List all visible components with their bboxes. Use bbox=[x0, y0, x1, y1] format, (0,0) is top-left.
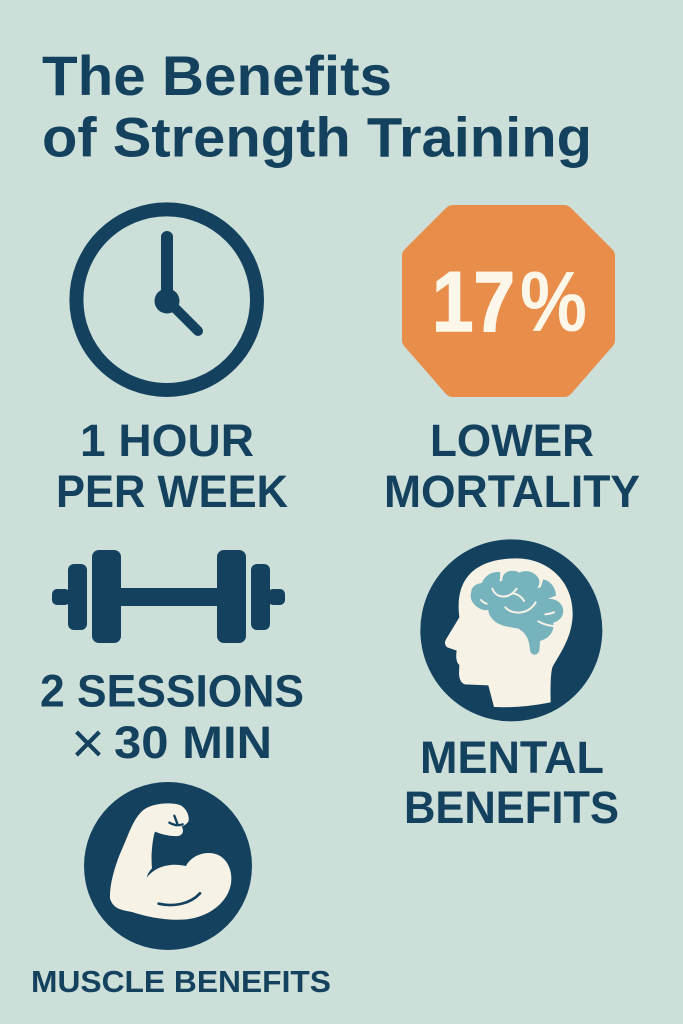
icon: dumbbell bbox=[52, 550, 285, 643]
head silhouette bbox=[445, 558, 573, 707]
label: lower mortality: LOWER bbox=[430, 415, 594, 466]
label: 1 hour per week bbox=[56, 415, 288, 517]
title bbox=[42, 44, 592, 168]
label: 2 sessions x 30 min: 30 MIN bbox=[114, 717, 272, 768]
label: 2 sessions x 30 min bbox=[40, 666, 304, 776]
label: lower mortality bbox=[384, 415, 640, 517]
title: The Benefits bbox=[42, 44, 392, 107]
title: of Strength Training bbox=[42, 106, 592, 168]
label: muscle benefits: MUSCLE BENEFITS bbox=[31, 964, 331, 999]
arm silhouette bbox=[110, 803, 231, 920]
label: 2 sessions x 30 min: 2 SESSIONS bbox=[40, 666, 304, 716]
label: mental benefits bbox=[404, 732, 619, 833]
label: 1 hour per week: 1 HOUR bbox=[80, 415, 254, 466]
badge: 17% octagon: 17 bbox=[432, 255, 515, 350]
icon: head with brain bbox=[420, 539, 602, 721]
label: 2 sessions x 30 min: × bbox=[71, 711, 105, 776]
label: mental benefits: BENEFITS bbox=[404, 782, 619, 833]
label: 1 hour per week: PER WEEK bbox=[56, 466, 288, 517]
badge: 17% octagon: % bbox=[520, 255, 587, 350]
label: lower mortality: MORTALITY bbox=[384, 466, 640, 517]
icon: flexed arm bbox=[84, 782, 252, 950]
icon: clock bbox=[76, 209, 257, 390]
badge: 17% octagon bbox=[402, 205, 615, 397]
brain bbox=[471, 571, 563, 655]
label: mental benefits: MENTAL bbox=[420, 732, 604, 783]
